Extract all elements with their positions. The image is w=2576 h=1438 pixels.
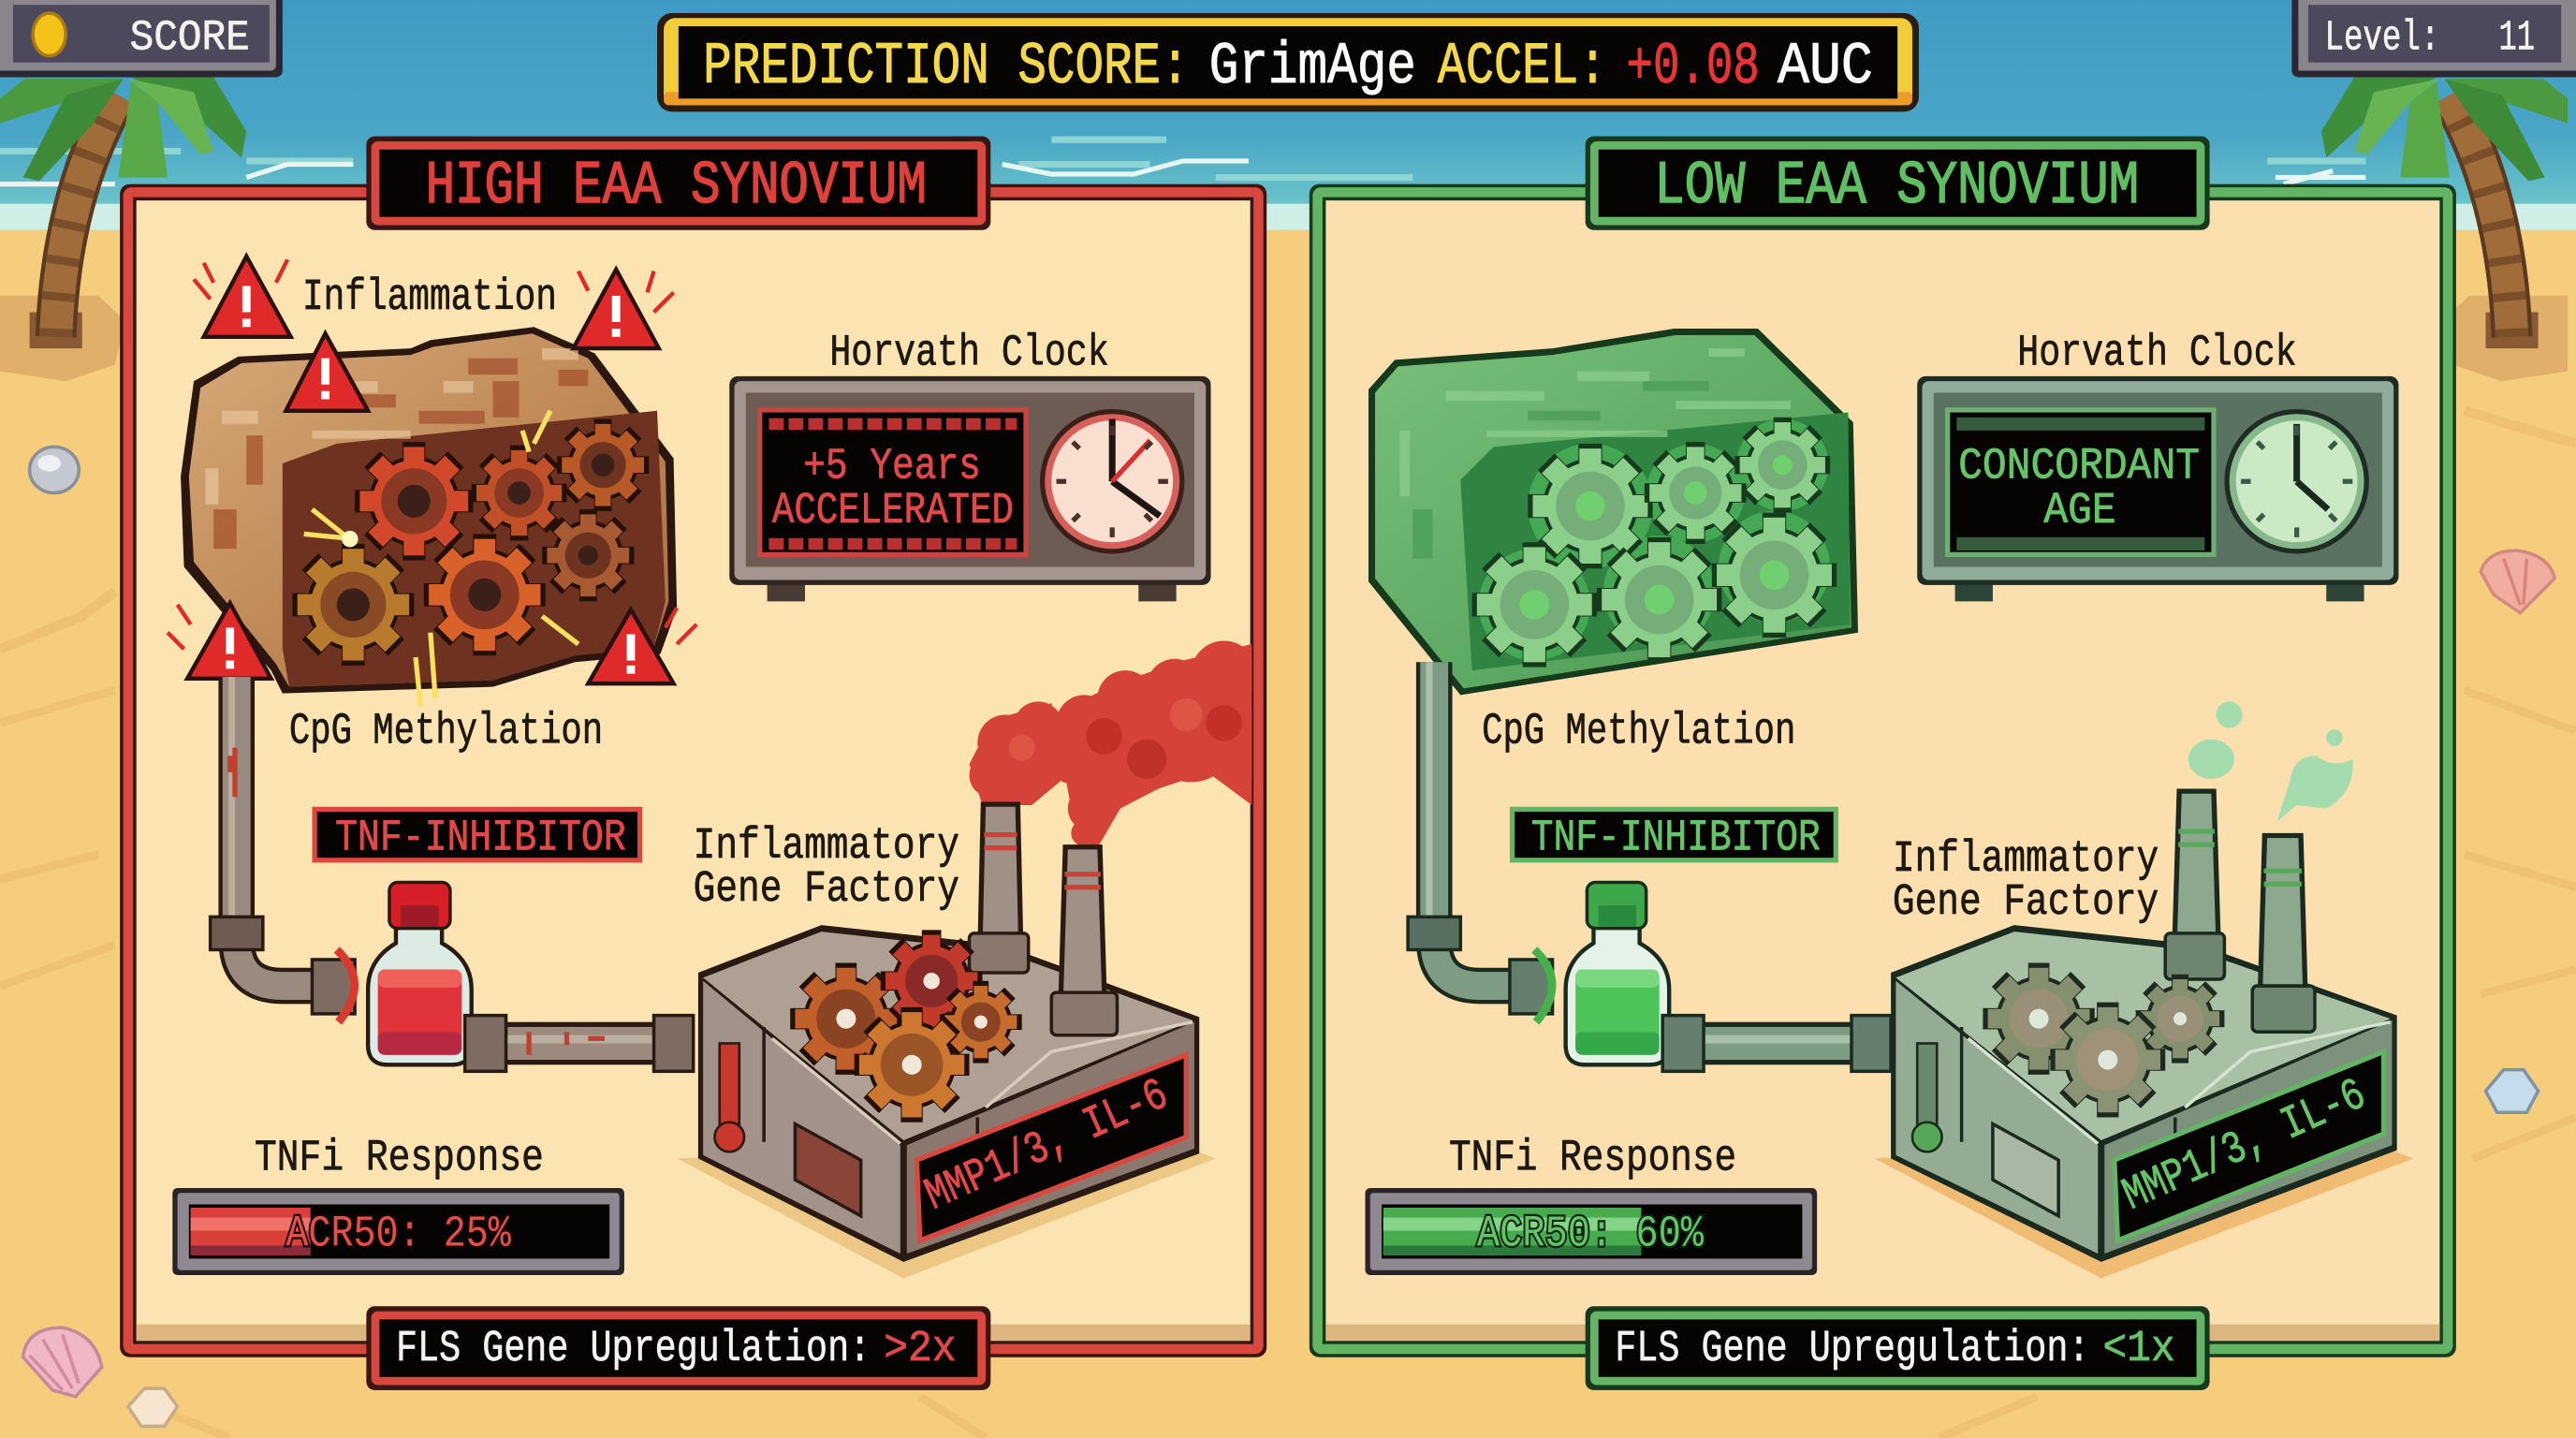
pipe: tissue to vial — [211, 677, 355, 1022]
icon: warning triangle 4 — [168, 603, 271, 679]
factory gears — [1983, 962, 2224, 1117]
display: MMP1/3, IL-6: MMP1/3, IL-6 — [2115, 1069, 2374, 1222]
shell: blue right — [2485, 1070, 2539, 1112]
gears — [292, 419, 649, 666]
footer: FLS gene upregulation low: FLS Gene Upregulation: — [1615, 1325, 2089, 1374]
inflamed tissue block — [181, 327, 677, 707]
shell: white bottom left — [128, 1388, 178, 1426]
panel frame — [1310, 184, 2456, 1357]
clock face — [1040, 409, 1184, 553]
footer: FLS gene upregulation low — [1586, 1306, 2210, 1390]
display: MMP1/3, IL-6: MMP1/3, IL-6 — [917, 1069, 1176, 1222]
door — [795, 1123, 861, 1216]
shell: pink right — [2481, 550, 2554, 613]
score box: SCORE — [130, 14, 250, 63]
heading: low EAA synovium — [1586, 137, 2210, 230]
smoke: red — [970, 640, 1275, 848]
level box: 11 — [2499, 14, 2535, 63]
title banner: prediction score: ACCEL: — [1438, 33, 1606, 100]
vial: red — [368, 882, 472, 1064]
footer: FLS gene upregulation high — [366, 1306, 990, 1390]
footer: FLS gene upregulation high: >2x — [884, 1325, 956, 1374]
vial: green — [1566, 882, 1669, 1064]
smoke: green wisps — [2188, 701, 2353, 822]
label: inflammatory gene factory: Inflammatory — [694, 822, 959, 872]
icon: warning triangle 1 — [194, 257, 291, 337]
title banner: prediction score: GrimAge — [1209, 33, 1416, 100]
heading: high EAA synovium — [366, 137, 990, 230]
horvath clock device: accelerated — [729, 376, 1211, 601]
label box: TNF-inhibitor: TNF-INHIBITOR — [335, 814, 626, 863]
shell: pink bottom left — [23, 1328, 102, 1397]
shell: grey left — [30, 447, 79, 493]
icon: warning triangle 2 — [285, 333, 368, 411]
label: CpG methylation: CpG Methylation — [1482, 707, 1795, 756]
label box: TNF-inhibitor: TNF-INHIBITOR — [1531, 814, 1821, 863]
icon: warning triangle 3 — [574, 270, 674, 348]
label: CpG methylation: CpG Methylation — [289, 707, 603, 756]
display: MMP1/3, IL-6 — [916, 1055, 1186, 1240]
title banner: prediction score — [657, 13, 1919, 111]
label: inflammation: Inflammation — [302, 273, 557, 323]
clock face — [2224, 409, 2369, 553]
factory walls — [1891, 925, 2397, 1262]
label: inflammatory gene factory: Gene Factory — [694, 865, 959, 915]
label: inflammatory gene factory: Inflammatory — [1893, 835, 2159, 885]
accelerated display: +5 Years — [803, 443, 981, 492]
label: inflammatory gene factory — [1893, 835, 2159, 928]
progress bar: ACR50 60% — [1365, 1188, 1817, 1275]
level box: Level: — [2324, 14, 2439, 63]
chimney 2 — [1051, 844, 1117, 1035]
heading: low EAA synovium: LOW EAA SYNOVIUM — [1654, 153, 2139, 221]
panel frame — [120, 184, 1266, 1357]
icon: coin — [33, 13, 66, 56]
factory walls — [698, 925, 1199, 1262]
sparks — [304, 411, 578, 707]
concordant display — [1945, 407, 2217, 557]
label: inflammatory gene factory: Gene Factory — [1893, 878, 2159, 928]
accelerated display: ACCELERATED — [772, 487, 1014, 536]
panel: high EAA synovium — [120, 137, 1275, 1390]
door — [1993, 1123, 2058, 1216]
footer: FLS gene upregulation low: <1x — [2103, 1325, 2175, 1374]
icon: warning triangle 5 — [588, 608, 696, 683]
title banner: prediction score: +0.08 — [1627, 33, 1760, 100]
label: inflammatory gene factory — [694, 822, 959, 915]
horvath clock device: concordant — [1917, 376, 2398, 601]
footer: FLS gene upregulation high: FLS Gene Upregulation: — [396, 1325, 871, 1374]
level box — [2291, 0, 2576, 77]
factory: inflammatory gene factory — [677, 801, 1216, 1278]
title banner: prediction score: PREDICTION SCORE: — [703, 33, 1190, 100]
palm tree right — [2321, 77, 2568, 381]
label: horvath clock: Horvath Clock — [829, 330, 1109, 379]
gears — [1472, 418, 1837, 668]
panel: low EAA synovium — [1310, 137, 2456, 1390]
pipe: vial to factory — [1662, 1016, 1891, 1071]
concordant display: CONCORDANT — [1958, 443, 2200, 492]
title banner: prediction score: AUC — [1778, 33, 1873, 100]
healthy tissue block — [1368, 329, 1858, 695]
label: horvath clock: Horvath Clock — [2017, 330, 2297, 379]
chimney 2 — [2252, 833, 2315, 1032]
chimney 1 — [970, 801, 1029, 973]
heading: high EAA synovium: HIGH EAA SYNOVIUM — [426, 153, 927, 221]
concordant display: AGE — [2043, 487, 2116, 536]
pipe: vial to factory — [465, 1016, 694, 1071]
label: TNFi response: TNFi Response — [255, 1135, 544, 1184]
score box — [0, 0, 283, 77]
progress bar: ACR50 60%: ACR50: 60% — [1477, 1210, 1705, 1259]
accelerated display — [757, 407, 1029, 557]
progress bar: ACR50 25%: ACR50: 25% — [285, 1210, 511, 1259]
factory gears — [790, 930, 1022, 1123]
pipe: tissue to vial — [1408, 662, 1553, 1022]
chimney 1 — [2165, 788, 2224, 979]
progress bar: ACR50 25% — [172, 1188, 624, 1275]
label: TNFi response: TNFi Response — [1449, 1135, 1736, 1184]
palm tree left — [0, 77, 246, 381]
factory: healthy gene factory — [1875, 788, 2413, 1278]
